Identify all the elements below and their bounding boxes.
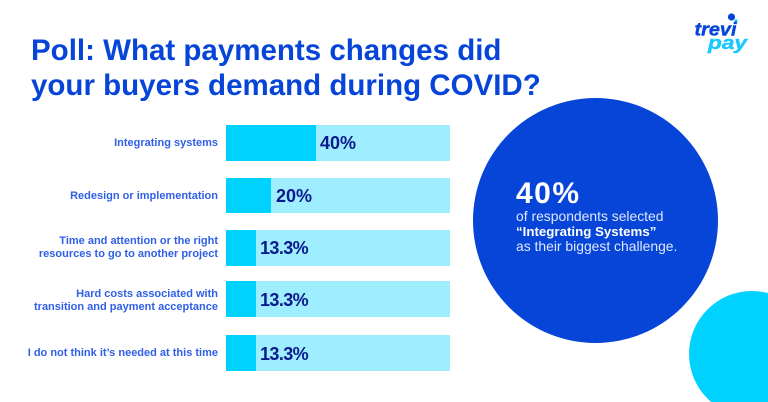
title (31, 34, 541, 102)
callout circle (473, 98, 718, 343)
row 3 bar (226, 230, 450, 266)
row 3 label: resources to go to another project (39, 248, 218, 260)
row 1 bar (226, 125, 450, 161)
row 4 label (34, 288, 218, 312)
row 4 fill (226, 281, 256, 317)
row 3 fill (226, 230, 256, 266)
title: Poll: What payments changes did (31, 34, 501, 67)
title: your buyers demand during COVID? (31, 69, 541, 102)
callout text (516, 208, 677, 254)
row 5 bar (226, 335, 450, 371)
row 2 value: 20% (276, 186, 312, 206)
row 3 value: 13.3% (260, 238, 308, 258)
row 3 label: Time and attention or the right (59, 235, 218, 247)
row 4 label: transition and payment acceptance (34, 300, 218, 312)
row 2 bar (226, 178, 450, 213)
row 1 fill (226, 125, 316, 161)
row 2 fill (226, 178, 271, 213)
row 3 label (39, 235, 218, 260)
row 4 bar (226, 281, 450, 317)
logo: trevipay: trevi (694, 20, 738, 40)
callout text: “Integrating Systems” (516, 224, 656, 239)
callout text: as their biggest challenge. (516, 238, 677, 254)
logo: trevipay (694, 13, 748, 54)
decorative cyan circle (689, 291, 768, 402)
row 1 value: 40% (320, 133, 356, 153)
callout number: 40% (516, 177, 581, 210)
row 5 fill (226, 335, 256, 371)
row 5 value: 13.3% (260, 344, 308, 364)
callout text: of respondents selected (516, 208, 664, 224)
row 4 value: 13.3% (260, 290, 308, 310)
logo: trevipay: pay (707, 33, 748, 53)
row 2 label: Redesign or implementation (70, 190, 218, 202)
row 1 label: Integrating systems (114, 137, 218, 149)
row 5 label: I do not think it’s needed at this time (28, 347, 218, 359)
row 4 label: Hard costs associated with (76, 288, 218, 300)
